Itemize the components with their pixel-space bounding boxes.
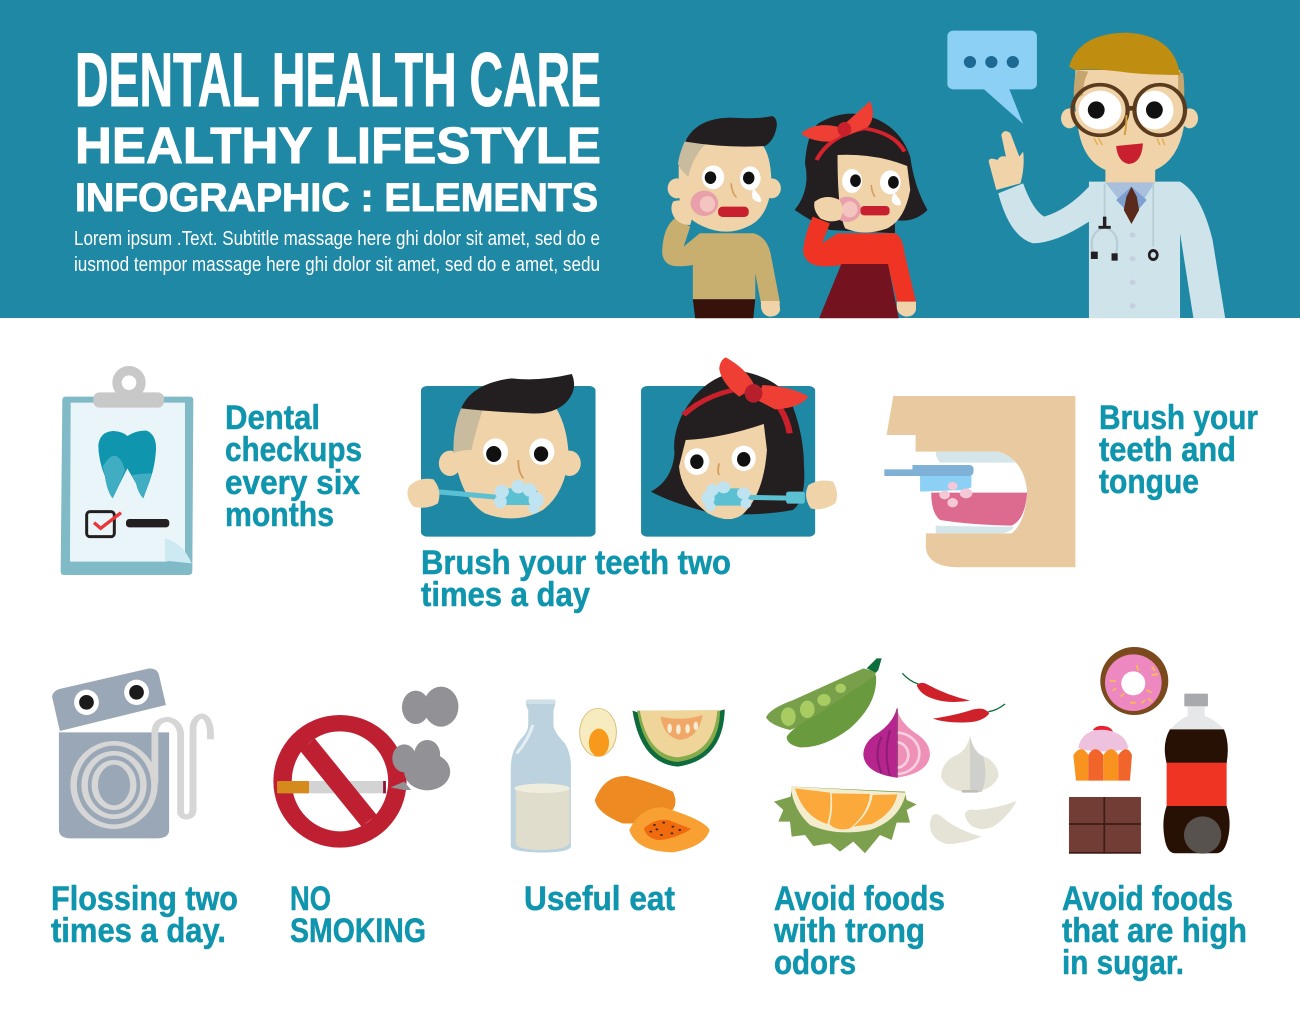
title: DENTAL HEALTH CARE: [75, 38, 601, 123]
panel: avoid strong odor foods: [766, 658, 1017, 982]
illustration: pea pod: [766, 658, 882, 747]
heading: avoid foods high in sugar: that are high: [1062, 912, 1247, 950]
heading: no smoking: [290, 880, 426, 950]
heading: avoid foods with strong odors: Avoid foods: [774, 880, 945, 918]
heading: avoid foods high in sugar: Avoid foods: [1062, 880, 1233, 918]
illustration: chocolate bar: [1069, 797, 1141, 854]
illustration: boy with toothache: [662, 116, 781, 318]
heading: brush your teeth and tongue: Brush your: [1099, 399, 1258, 437]
heading: brush your teeth two times a day: [421, 544, 731, 614]
heading: brush your teeth and tongue: tongue: [1099, 463, 1199, 501]
title: HEALTHY LIFESTYLE: [75, 117, 601, 174]
icon: clipboard with tooth: [61, 371, 193, 575]
panel: header banner: [0, 0, 1300, 318]
heading: flossing two times a day: Flossing two: [51, 880, 238, 918]
illustration: milk bottle: [511, 699, 571, 853]
illustration: red onion: [863, 708, 930, 778]
heading: avoid foods with strong odors: odors: [774, 944, 856, 982]
panel: avoid sugar: [1062, 647, 1247, 982]
icon: speech bubble: [947, 31, 1037, 124]
heading: brush your teeth and tongue: teeth and: [1099, 431, 1236, 469]
illustration: egg, melon and papaya: [580, 708, 725, 852]
illustration: girl brushing: [641, 357, 837, 537]
heading: dental checkups: [225, 399, 362, 534]
panel: flossing: [51, 668, 238, 950]
illustration: durian: [774, 787, 917, 853]
illustration: soda bottle: [1163, 694, 1230, 854]
heading: no smoking: NO: [290, 880, 331, 918]
icon: dental floss box: [52, 668, 211, 838]
illustration: cupcake: [1073, 726, 1132, 781]
heading: useful eat: Useful eat: [524, 880, 675, 918]
panel: dental checkups: [61, 371, 362, 575]
icon: no smoking sign: [273, 687, 458, 848]
heading: dental checkups: every six: [225, 464, 360, 502]
panel: no smoking: [273, 687, 458, 950]
subtitle text: [74, 228, 600, 276]
heading: no smoking: SMOKING: [290, 912, 426, 950]
heading: avoid foods with strong odors: with trong: [773, 912, 925, 950]
heading: flossing two times a day: times a day.: [51, 912, 226, 950]
heading: avoid foods high in sugar: in sugar.: [1062, 944, 1184, 982]
heading: brush your teeth and tongue: [1099, 399, 1258, 501]
heading: brush your teeth two times a day: Brush your teeth two: [421, 544, 731, 582]
illustration: chili peppers: [902, 673, 1005, 723]
panel: brush teeth: [407, 357, 837, 614]
heading: avoid foods high in sugar: [1062, 880, 1247, 982]
heading: dental checkups: months: [225, 496, 334, 534]
illustration: donut: [1100, 647, 1168, 715]
panel: useful eat: [511, 699, 725, 918]
heading: dental checkups: checkups: [225, 431, 362, 469]
heading: flossing two times a day: [51, 880, 238, 950]
illustration: boy brushing: [407, 374, 596, 537]
title: [75, 38, 601, 220]
illustration: garlic: [930, 736, 1017, 844]
illustration: doctor: [989, 33, 1225, 318]
illustration: mouth cross section with toothbrush: [884, 396, 1075, 567]
heading: brush your teeth two times a day: times a day: [421, 576, 590, 614]
icon: smoke clouds: [390, 687, 458, 790]
title: INFOGRAPHIC : ELEMENTS: [75, 176, 598, 220]
heading: dental checkups: Dental: [225, 399, 320, 437]
subtitle text: iusmod tempor massage here ghi dolor sit amet, sed do e amet, sedu: [74, 254, 600, 276]
panel: brush teeth and tongue: [884, 396, 1258, 567]
heading: avoid foods with strong odors: [773, 880, 945, 982]
illustration: girl with toothache: [795, 101, 927, 318]
subtitle text: Lorem ipsum .Text. Subtitle massage here ghi dolor sit amet, sed do e: [74, 228, 600, 250]
